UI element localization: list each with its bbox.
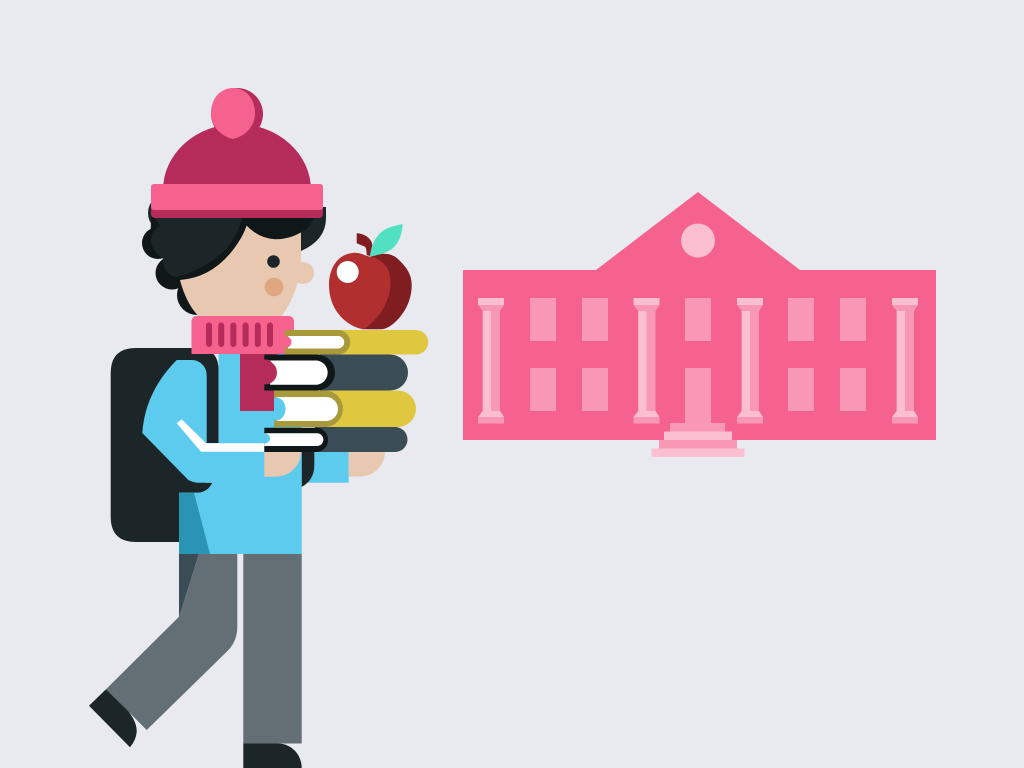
left arm sleeve [142, 360, 264, 483]
eye [267, 255, 280, 268]
apple body [329, 253, 391, 329]
book 4 dark [264, 427, 407, 452]
apple [329, 224, 412, 329]
nose [292, 262, 314, 284]
roof round window [681, 224, 715, 258]
apple leaf [370, 224, 403, 257]
hat dome [163, 124, 311, 190]
hat band [151, 184, 323, 218]
apple dark side [353, 253, 412, 329]
scarf ribs [206, 322, 273, 347]
book 3 yellow [274, 390, 416, 427]
book 1 yellow [280, 330, 428, 354]
arm crease line [177, 419, 264, 452]
apple highlight [337, 261, 359, 283]
backpack [111, 348, 219, 542]
windows [530, 298, 866, 411]
cheek [265, 278, 283, 296]
front leg [243, 554, 302, 744]
right arm sleeve and hand [301, 452, 385, 483]
student [89, 88, 428, 768]
college building [463, 192, 936, 457]
pompom [211, 88, 263, 140]
apple stem [357, 233, 373, 257]
back shoe [89, 689, 137, 747]
book stack [253, 330, 428, 452]
hat [151, 88, 323, 218]
hair fringe [150, 205, 314, 280]
front shoe [243, 744, 302, 768]
door [685, 368, 711, 424]
torso [179, 354, 302, 554]
back hair [142, 193, 326, 315]
back strap lower [302, 450, 314, 487]
back leg [106, 554, 237, 730]
scarf [192, 316, 294, 354]
left hand [264, 452, 301, 477]
columns [478, 298, 918, 424]
building body with roof [463, 192, 936, 440]
entrance steps [652, 423, 744, 457]
book 2 dark [253, 354, 408, 390]
scarf tail [240, 354, 277, 411]
face [180, 222, 301, 316]
